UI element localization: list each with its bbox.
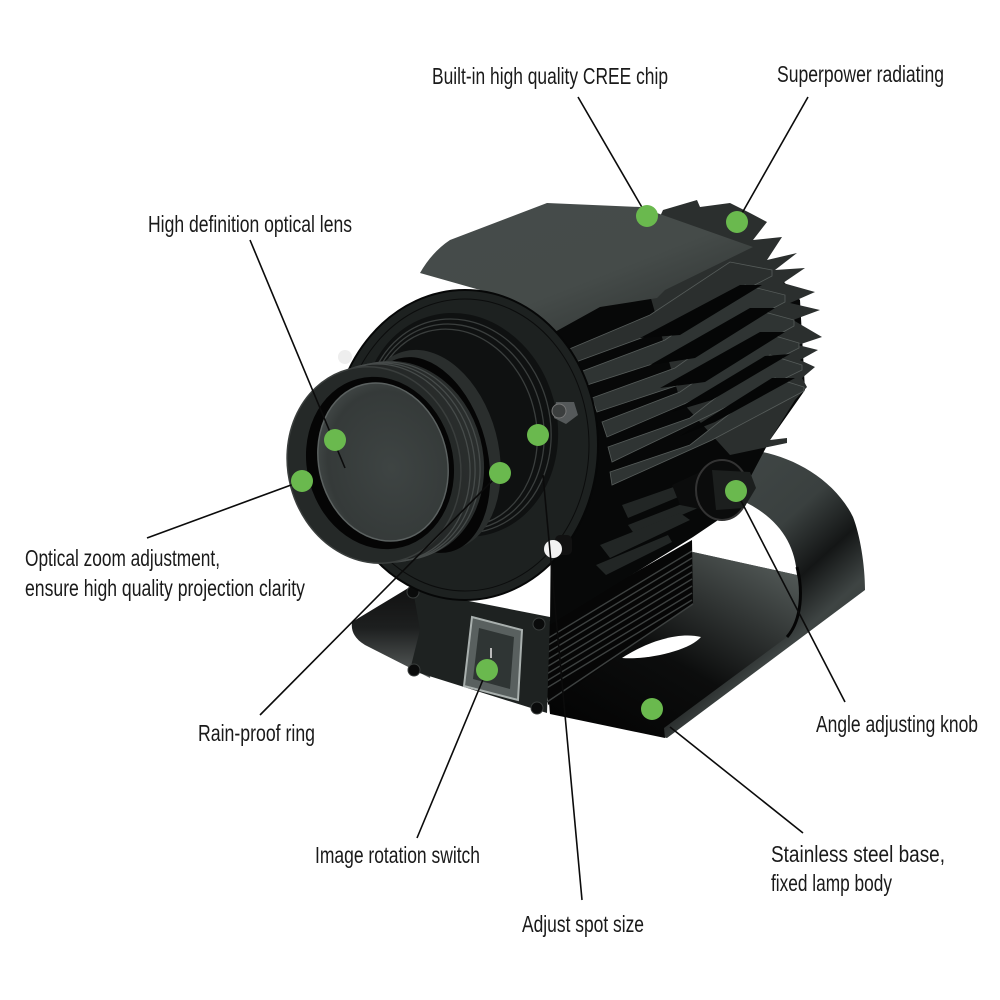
heat sink block xyxy=(543,540,693,705)
body core xyxy=(550,247,805,625)
green marker dots xyxy=(291,205,748,720)
label: radiating: Superpower radiating xyxy=(777,61,944,87)
radiator spike silhouette xyxy=(640,200,822,455)
inner barrel xyxy=(338,334,522,566)
switch box xyxy=(410,590,550,713)
top shroud xyxy=(420,203,753,333)
switch xyxy=(464,617,522,700)
base plate xyxy=(543,552,801,738)
label: CREE chip: Built-in high quality CREE chip xyxy=(432,63,668,89)
lens glass xyxy=(300,368,466,556)
radiator fins xyxy=(567,262,804,485)
main flange xyxy=(332,290,598,600)
label: stainless base: Stainless steel base, xyxy=(771,841,945,867)
base plate left wing xyxy=(352,587,440,678)
bolts xyxy=(552,402,578,424)
label: rotation switch: Image rotation switch xyxy=(315,842,480,868)
dark fin gaps xyxy=(640,285,795,436)
front threaded section xyxy=(290,341,506,579)
mounting hole xyxy=(622,636,701,658)
angle adjusting knob xyxy=(672,460,756,520)
label: optical zoom: ensure high quality projection clarity xyxy=(25,575,305,601)
stand bracket xyxy=(543,449,865,738)
label: rain-proof ring: Rain-proof ring xyxy=(198,720,315,746)
lower fins xyxy=(596,475,712,575)
label: stainless base: fixed lamp body xyxy=(771,870,892,896)
label: stainless base xyxy=(771,841,945,896)
box screws xyxy=(407,586,545,714)
lens ring xyxy=(265,347,483,583)
label: spot size: Adjust spot size xyxy=(522,911,644,937)
projector device xyxy=(265,200,865,738)
leader lines xyxy=(147,97,845,900)
label: optical lens: High definition optical lens xyxy=(148,211,352,237)
label: optical zoom xyxy=(25,545,305,601)
threaded ring xyxy=(337,291,583,559)
label: optical zoom: Optical zoom adjustment, xyxy=(25,545,220,571)
